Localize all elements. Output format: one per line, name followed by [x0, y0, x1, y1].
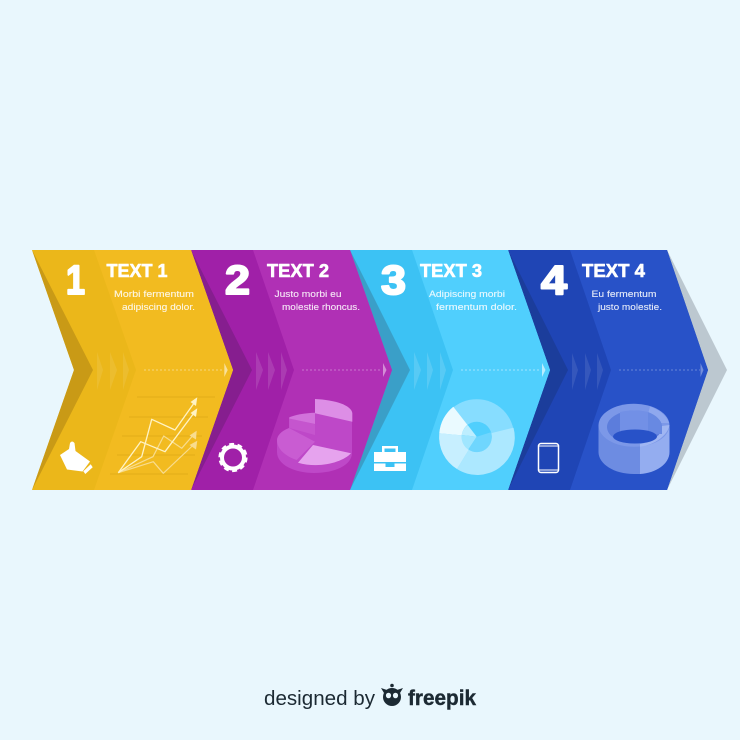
text: step 4: justo molestie.: [597, 302, 662, 313]
logo: designed by freepik: designed by: [264, 688, 375, 710]
text: step 4: [541, 257, 662, 313]
text: step 3: fermentum dolor.: [436, 302, 517, 313]
panel: step 3 arrow: [350, 250, 550, 490]
text: step 2: TEXT 2: [267, 261, 329, 281]
grey drop shadow of last arrow: [667, 250, 727, 490]
text: step 2: 2: [225, 257, 250, 303]
text: step 1: adipiscing dolor.: [122, 302, 195, 313]
text: step 1: [66, 257, 195, 313]
text: step 3: [381, 257, 517, 313]
text: step 2: Justo morbi eu: [274, 289, 342, 300]
text: step 2: molestie rhoncus.: [282, 302, 360, 313]
logo: designed by freepik: freepik: [408, 687, 476, 710]
logo: designed by freepik: [264, 684, 476, 710]
icon: gear: [220, 444, 246, 471]
text: step 3: 3: [381, 257, 406, 303]
text: step 4: TEXT 4: [582, 261, 645, 281]
3D pie chart: [277, 399, 352, 473]
panel: step 4 arrow: [508, 250, 708, 490]
line chart: [110, 397, 215, 474]
text: step 4: Eu fermentum: [592, 289, 657, 300]
icon: briefcase: [374, 446, 406, 471]
text: step 1: TEXT 1: [106, 261, 168, 281]
panel: step 1 arrow: [32, 250, 233, 490]
text: step 3: Adipiscing morbi: [429, 289, 505, 300]
text: step 1: 1: [66, 257, 85, 303]
panel: step 2 arrow: [191, 250, 392, 490]
text: step 2: [225, 257, 360, 313]
icon: thumbs up hand: [60, 442, 93, 474]
text: step 3: TEXT 3: [420, 261, 482, 281]
icon: tablet: [538, 444, 558, 472]
text: step 1: Morbi fermentum: [114, 289, 194, 300]
donut chart: [439, 399, 515, 475]
3D ring chart: [598, 404, 670, 474]
text: step 4: 4: [541, 257, 567, 303]
